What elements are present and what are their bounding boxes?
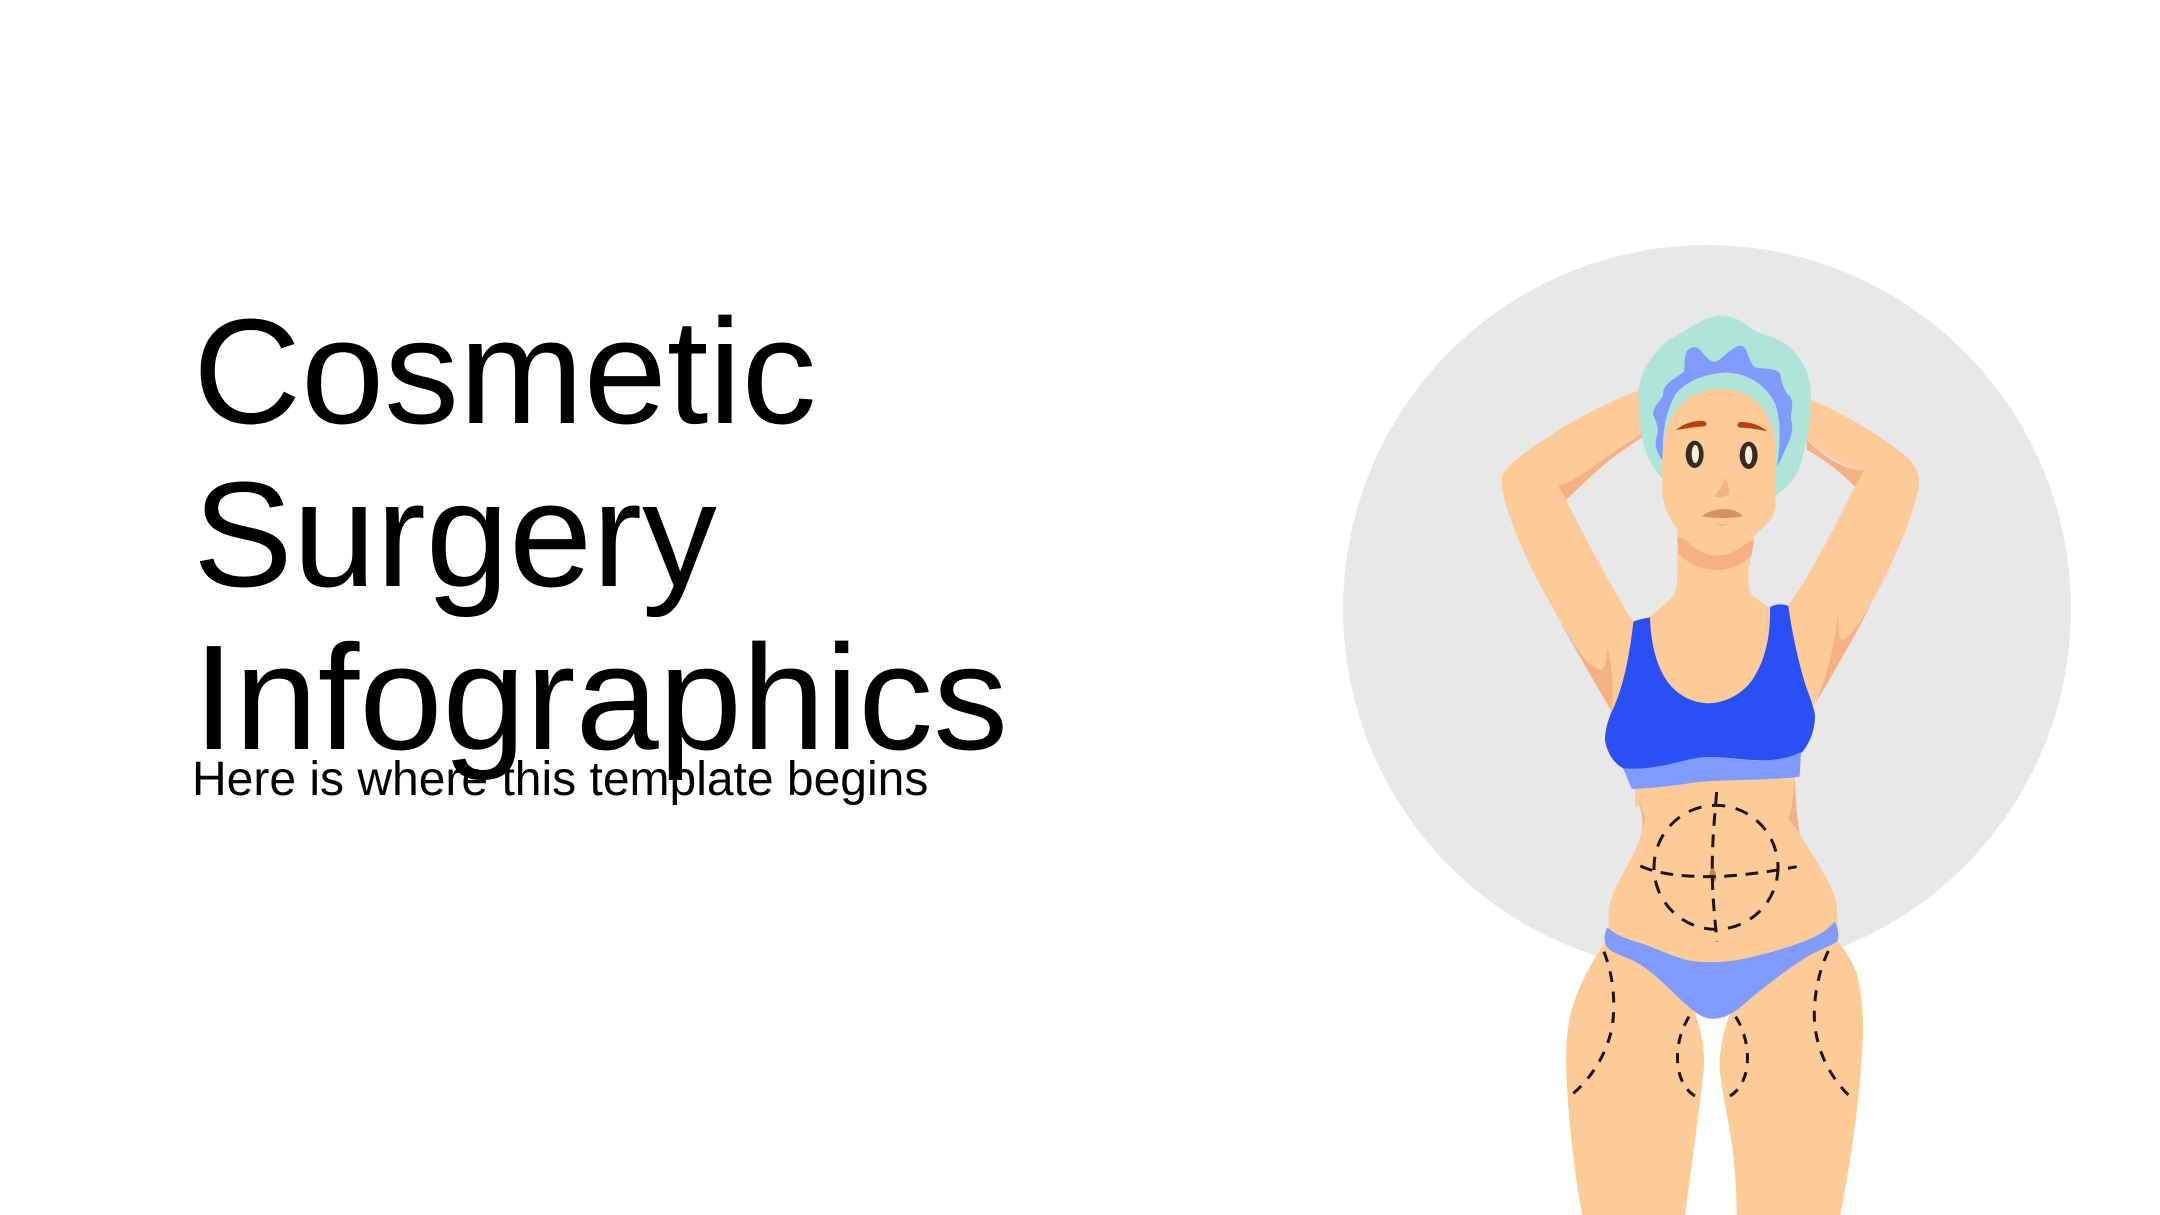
outer left thigh marking (1573, 952, 1614, 1093)
vertical dashed line (1712, 792, 1717, 941)
subtitle: Here is where this template begins (192, 753, 928, 806)
title (193, 288, 1008, 781)
outer right thigh marking (1814, 951, 1848, 1095)
background grey circle (1343, 245, 2071, 973)
title: Cosmetic (193, 288, 816, 455)
neck and head (1638, 316, 1811, 620)
title: Infographics (193, 614, 1008, 781)
navel (1709, 866, 1716, 883)
belly (1608, 780, 1837, 943)
sports bra (1605, 604, 1815, 789)
cap inner band (1663, 373, 1780, 483)
eyes (1686, 441, 1704, 468)
dashed circle (1654, 805, 1778, 929)
underwear (1605, 922, 1838, 1019)
bra band (1623, 752, 1801, 789)
inner right thigh marking (1730, 1017, 1748, 1096)
torso (1605, 597, 1815, 807)
face (1662, 389, 1776, 556)
eyebrows (1676, 421, 1706, 430)
cap blue band (1653, 346, 1792, 470)
mouth (1702, 509, 1743, 518)
underarm and waist shadows (1560, 605, 1871, 835)
figure: woman (1502, 316, 1919, 1215)
inner left thigh marking (1677, 1017, 1695, 1096)
arms (1502, 390, 1919, 710)
neck (1650, 523, 1773, 620)
lower body and legs (1566, 940, 1863, 1215)
surgical cap (1638, 316, 1811, 497)
surgical markings on abdomen (1640, 792, 1797, 941)
horizontal dashed line (1640, 866, 1797, 877)
title: Surgery (193, 451, 717, 618)
surgical markings on thighs (1573, 951, 1848, 1096)
nose (1714, 477, 1729, 497)
neck shadow (1677, 537, 1754, 570)
